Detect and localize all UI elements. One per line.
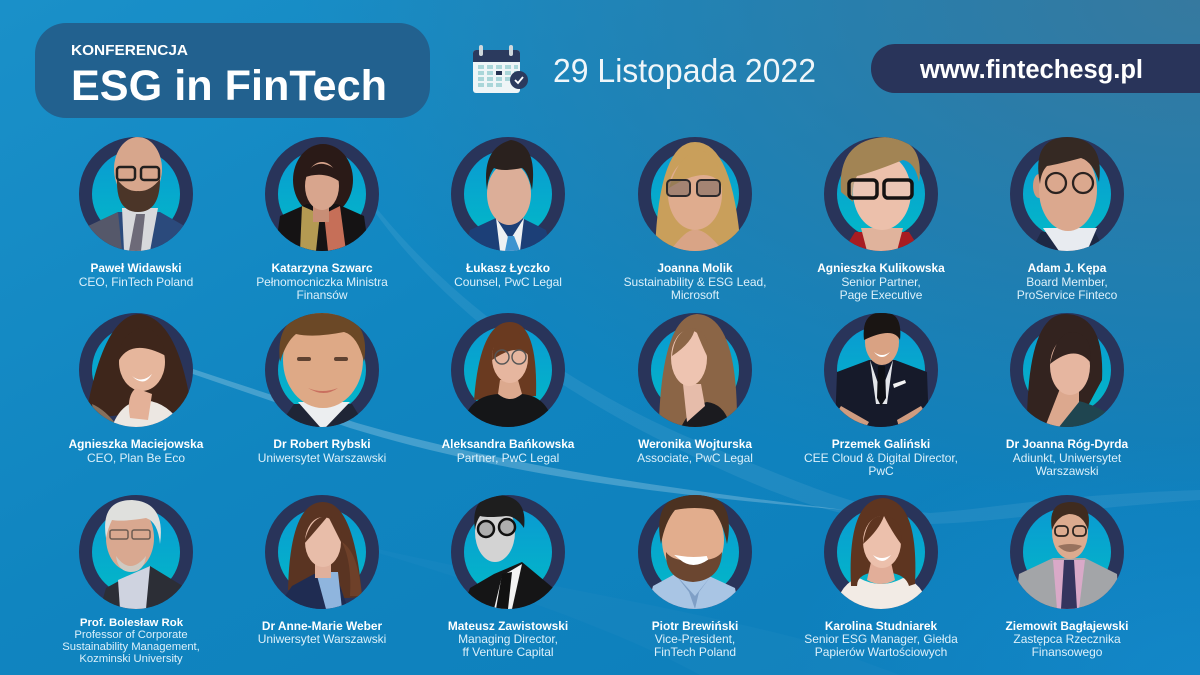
- portrait: [265, 137, 379, 251]
- name: Prof. Bolesław Rok: [80, 617, 184, 629]
- role: Counsel, PwC Legal: [454, 275, 562, 289]
- portrait: [451, 313, 565, 427]
- role: Senior ESG Manager, Giełda: [804, 632, 958, 646]
- speaker: Mateusz Zawistowski: ff Venture Capital: [463, 645, 553, 659]
- role: Senior Partner,: [841, 275, 921, 289]
- portrait: [79, 495, 193, 609]
- speaker: Piotr Brewiński: FinTech Poland: [654, 645, 736, 659]
- speaker: Joanna Molik: Microsoft: [671, 288, 720, 302]
- speaker: Agnieszka Kulikowska: [817, 137, 945, 302]
- portrait: [451, 137, 565, 251]
- portrait: [1010, 495, 1124, 609]
- name: Łukasz Łyczko: [466, 261, 550, 275]
- name: Agnieszka Kulikowska: [817, 261, 945, 275]
- role: Board Member,: [1026, 275, 1108, 289]
- name: Dr Joanna Róg-Dyrda: [1006, 437, 1128, 451]
- role: CEO, Plan Be Eco: [87, 451, 185, 465]
- portrait: [638, 313, 752, 427]
- name: Aleksandra Bańkowska: [442, 437, 575, 451]
- speaker: Prof. Bolesław Rok: [62, 495, 200, 665]
- portrait: [451, 495, 565, 609]
- speaker: Agnieszka Kulikowska: Page Executive: [840, 288, 923, 302]
- portrait: [265, 495, 379, 609]
- portrait: [824, 312, 938, 427]
- speaker: Katarzyna Szwarc: Finansów: [297, 288, 348, 302]
- speaker: Joanna Molik: [624, 137, 766, 302]
- speaker: Dr Joanna Róg-Dyrda: Warszawski: [1035, 464, 1099, 478]
- speaker: Adam J. Kępa: [1010, 137, 1124, 302]
- role: Managing Director,: [458, 632, 558, 646]
- role: Uniwersytet Warszawski: [258, 632, 386, 646]
- icon: calendar: [473, 45, 528, 93]
- speaker: Agnieszka Maciejowska: [69, 313, 204, 465]
- speaker: Karolina Studniarek: Papierów Wartościowych: [815, 645, 947, 659]
- speaker: Przemek Galiński: [804, 312, 958, 478]
- role: Adiunkt, Uniwersytet: [1013, 451, 1122, 465]
- portrait: [265, 312, 379, 427]
- speaker: Katarzyna Szwarc: [256, 137, 388, 302]
- role: Sustainability & ESG Lead,: [624, 275, 766, 289]
- name: Adam J. Kępa: [1028, 261, 1107, 275]
- speaker: Prof. Bolesław Rok: Kozminski University: [79, 653, 183, 665]
- name: Dr Robert Rybski: [273, 437, 371, 451]
- name: Weronika Wojturska: [638, 437, 752, 451]
- portrait: [824, 137, 938, 251]
- portrait: [79, 137, 193, 251]
- role: Professor of Corporate: [74, 629, 188, 641]
- portrait: [1010, 137, 1124, 251]
- role: Pełnomocniczka Ministra: [256, 275, 388, 289]
- name: Katarzyna Szwarc: [271, 261, 373, 275]
- speaker: Adam J. Kępa: ProService Finteco: [1017, 288, 1118, 302]
- speaker: Mateusz Zawistowski: [448, 495, 568, 659]
- speaker: Dr Anne-Marie Weber: [258, 495, 386, 646]
- speaker: Paweł Widawski: [79, 137, 193, 289]
- speaker: Ziemowit Bagłajewski: Finansowego: [1032, 645, 1103, 659]
- name: Joanna Molik: [657, 261, 733, 275]
- website pill: www.fintechesg.pl: [919, 56, 1143, 84]
- speaker: Piotr Brewiński: [638, 493, 752, 659]
- speaker: Aleksandra Bańkowska: [442, 313, 575, 465]
- conference label: KONFERENCJA: [71, 43, 189, 59]
- main title: ESG in FinTech: [71, 62, 387, 110]
- name: Agnieszka Maciejowska: [69, 437, 204, 451]
- name: Karolina Studniarek: [825, 619, 938, 633]
- speaker: Weronika Wojturska: [637, 313, 753, 465]
- role: CEO, FinTech Poland: [79, 275, 193, 289]
- role: Associate, PwC Legal: [637, 451, 753, 465]
- portrait: [824, 495, 938, 609]
- speaker: Przemek Galiński: PwC: [868, 464, 894, 478]
- role: Partner, PwC Legal: [457, 451, 559, 465]
- name: Mateusz Zawistowski: [448, 619, 568, 633]
- title panel: [35, 23, 430, 118]
- portrait: [79, 313, 193, 427]
- role: Vice-President,: [655, 632, 735, 646]
- name: Ziemowit Bagłajewski: [1006, 619, 1128, 633]
- portrait: [1010, 313, 1124, 427]
- website pill: [871, 44, 1200, 93]
- name: Przemek Galiński: [832, 437, 930, 451]
- speaker: Dr Joanna Róg-Dyrda: [1006, 313, 1128, 478]
- speaker: Ziemowit Bagłajewski: [1006, 495, 1128, 659]
- portrait: [638, 493, 752, 609]
- speaker: Karolina Studniarek: [804, 495, 958, 659]
- role: Zastępca Rzecznika: [1013, 632, 1121, 646]
- name: Dr Anne-Marie Weber: [262, 619, 382, 633]
- name: Piotr Brewiński: [652, 619, 738, 633]
- speaker: Dr Robert Rybski: [258, 312, 386, 465]
- name: Paweł Widawski: [90, 261, 182, 275]
- speaker: Łukasz Łyczko: [451, 137, 565, 289]
- date: 29 Listopada 2022: [553, 53, 816, 90]
- role: Uniwersytet Warszawski: [258, 451, 386, 465]
- speaker: Prof. Bolesław Rok: Sustainability Management,: [62, 641, 200, 653]
- portrait: [638, 137, 752, 251]
- role: CEE Cloud & Digital Director,: [804, 451, 958, 465]
